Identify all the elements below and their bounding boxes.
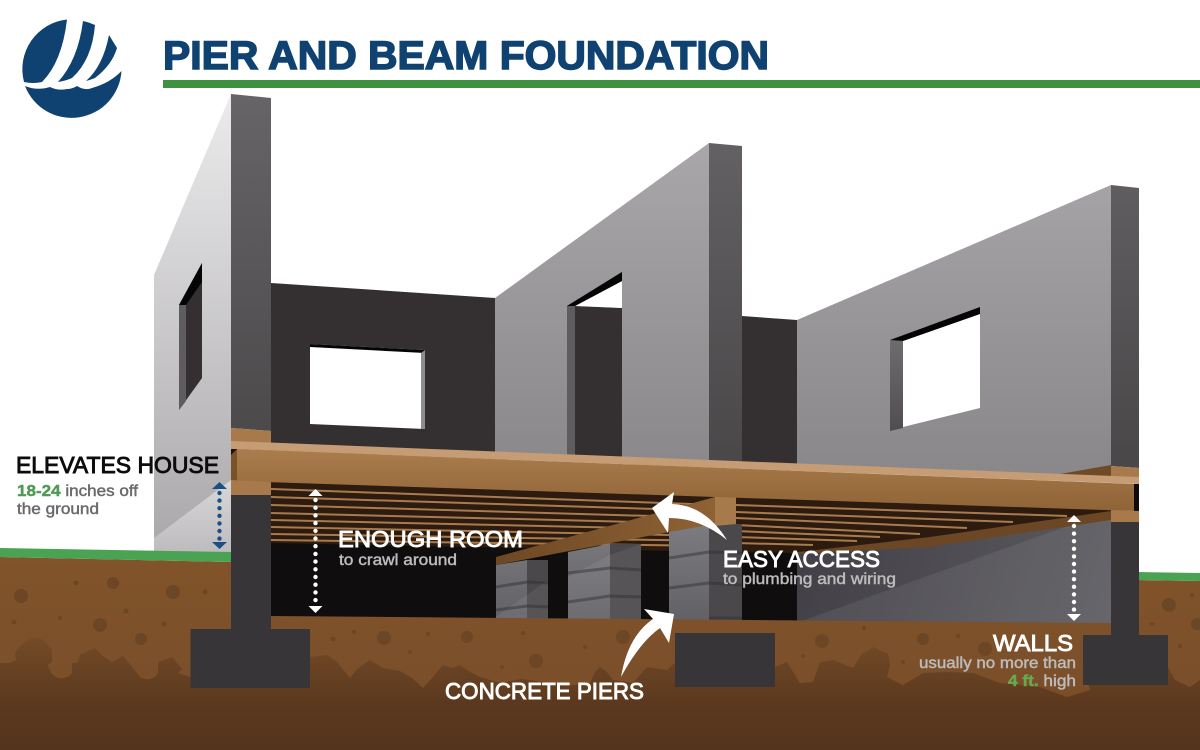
corner post middle: [709, 143, 742, 466]
arrow: concrete piers: [621, 609, 674, 677]
pier 3: [669, 524, 742, 633]
diagonal girder left: [496, 497, 715, 565]
label: easy access: EASY ACCESS: [723, 546, 880, 572]
footings and posts: [190, 495, 1168, 688]
label: elevates house: the ground: [17, 501, 99, 518]
left side wall: [154, 94, 231, 553]
label: concrete piers: CONCRETE PIERS: [445, 678, 644, 704]
label: enough room: [338, 526, 523, 569]
joist stripes right: [736, 505, 1067, 545]
soil pebbles: [12, 577, 1200, 669]
pier 1: [496, 560, 548, 622]
beam front face: [237, 449, 1134, 511]
beam right gap: [1134, 484, 1139, 512]
grass right: [1139, 572, 1200, 581]
middle wall: [495, 143, 709, 464]
label: elevates house: [16, 452, 219, 518]
house walls: [154, 94, 1139, 553]
soil: [0, 557, 1200, 750]
dimension arrow: elevation: [212, 482, 227, 549]
left wall lower light section: [154, 480, 231, 553]
left foundation post: [231, 495, 271, 631]
label: walls: usually no more than: [919, 655, 1076, 672]
label: enough room: to crawl around: [339, 552, 457, 569]
center footing: [675, 633, 775, 687]
crawl space dark: [271, 538, 801, 628]
right block under beam: [1111, 510, 1139, 522]
beam top face: [231, 441, 1139, 484]
corner post left: [231, 94, 271, 431]
right crawl space wall: [782, 518, 1111, 628]
label: elevates house: ELEVATES HOUSE: [16, 452, 219, 478]
label: walls: [919, 630, 1076, 690]
girder post: [715, 496, 736, 526]
label: walls: 4 ft. high: [1008, 673, 1076, 690]
beam left end: [231, 449, 237, 481]
arrow: easy access: [652, 492, 727, 540]
diagonal girder right: [790, 511, 1111, 554]
floor joists: [271, 476, 1125, 553]
left wall window: [179, 263, 202, 410]
label: walls: WALLS: [993, 630, 1073, 656]
girder beams: [496, 496, 1111, 565]
left footing: [190, 629, 310, 688]
main beam: [231, 441, 1139, 522]
right wall window: [890, 307, 980, 431]
second back wall: [742, 316, 797, 468]
middle wall opening: [567, 272, 622, 460]
grass left: [0, 548, 231, 562]
right foundation post: [1111, 520, 1139, 638]
label: easy access: to plumbing and wiring: [723, 571, 896, 588]
right footing: [1083, 635, 1168, 685]
left block under beam: [231, 480, 271, 495]
deep soil with bumpy edge: [0, 638, 1200, 750]
corner post right: [1111, 185, 1139, 468]
back wall window: [310, 344, 425, 429]
main soil: [0, 557, 1200, 750]
joist stripes left: [271, 489, 720, 546]
dimension arrow: walls: [1067, 515, 1081, 621]
sill blocks: [231, 428, 1139, 480]
pier 2: [568, 544, 641, 622]
label: elevates house: 18-24 inches off: [17, 483, 139, 500]
title: PIER AND BEAM FOUNDATION: [163, 34, 769, 78]
label: enough room: ENOUGH ROOM: [338, 526, 523, 552]
title rule: [163, 80, 1200, 88]
dimension arrow: crawl room: [308, 489, 322, 613]
right wall: [797, 185, 1111, 480]
logo: [22, 20, 122, 118]
back wall: [271, 283, 495, 454]
concrete piers: [496, 524, 742, 633]
label: easy access: [723, 546, 896, 588]
